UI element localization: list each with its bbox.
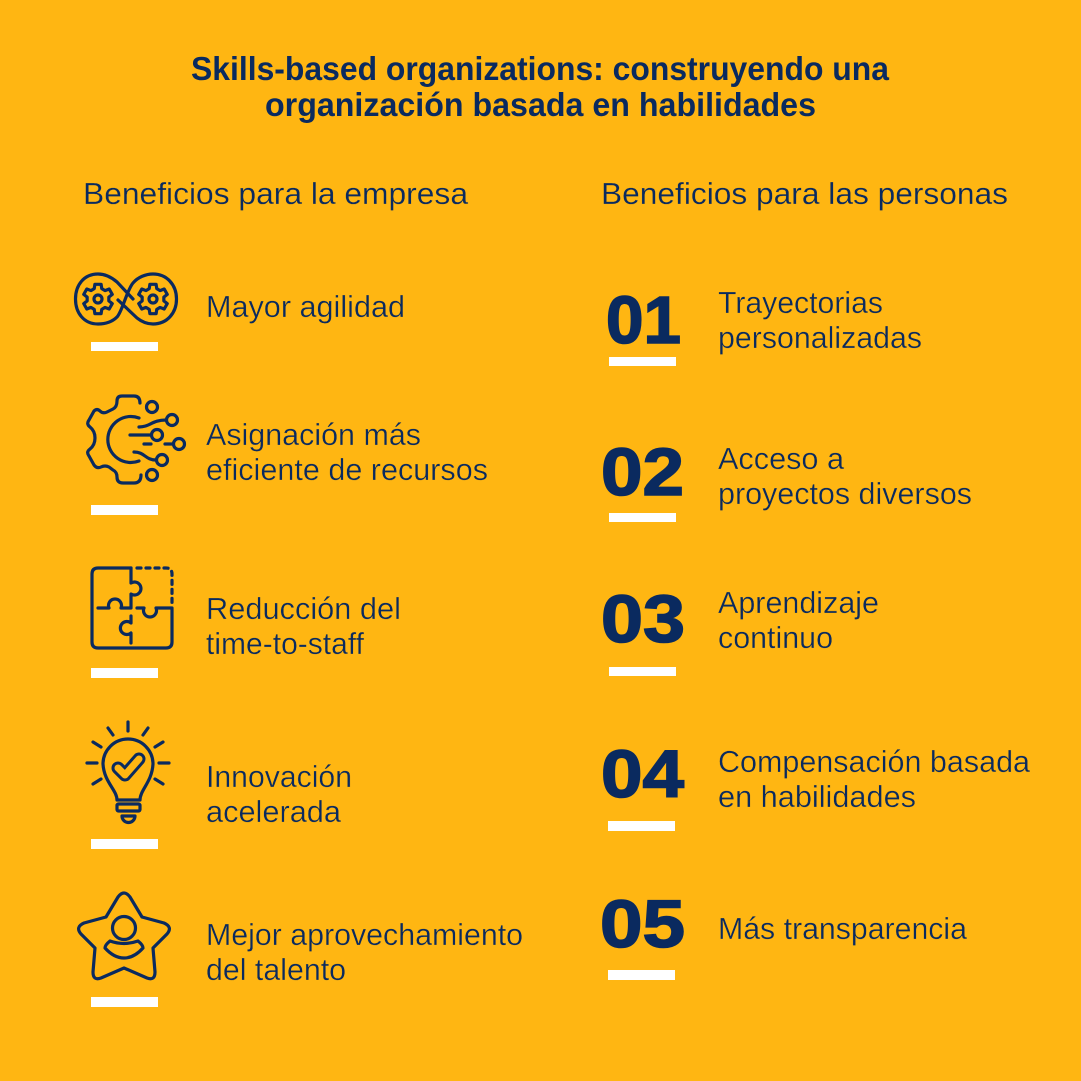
- bar: [91, 668, 158, 678]
- icon: light bulb with check: [87, 722, 169, 823]
- bar: [91, 342, 158, 351]
- heading: company benefits: Beneficios para la empresa: [83, 176, 469, 211]
- label: acelerada: [206, 794, 342, 829]
- item 02: [601, 435, 972, 522]
- bar: [91, 997, 158, 1007]
- icon: gear with circuit nodes: [88, 396, 184, 483]
- label: Aprendizaje: [718, 585, 879, 620]
- label: [718, 285, 922, 355]
- number 05: 05: [600, 887, 685, 962]
- title: [191, 50, 890, 123]
- item 05: [600, 887, 968, 980]
- label: personalizadas: [718, 320, 922, 355]
- item 01: [606, 283, 922, 366]
- label: [718, 744, 1031, 814]
- item 03: [601, 582, 879, 676]
- label: en habilidades: [718, 779, 916, 814]
- number 01: 01: [606, 283, 681, 358]
- panel: company benefits list: [76, 274, 523, 1007]
- panel: people benefits list: [600, 283, 1031, 980]
- bar: [609, 667, 676, 676]
- number 03: 03: [601, 582, 685, 657]
- item: asignacion de recursos: [88, 396, 488, 515]
- label: [206, 417, 488, 487]
- label: Asignación más: [206, 417, 421, 452]
- label: Compensación basada: [718, 744, 1031, 779]
- heading: people benefits: Beneficios para las personas: [601, 176, 1008, 211]
- bar: [608, 821, 675, 831]
- title: organización basada en habilidades: [265, 86, 816, 123]
- bar: [609, 513, 676, 522]
- item 04: [601, 737, 1031, 831]
- title: Skills-based organizations: construyendo una: [191, 50, 890, 87]
- label: Acceso a: [718, 441, 845, 476]
- label: time-to-staff: [206, 626, 364, 661]
- number 02: 02: [601, 435, 684, 510]
- label: proyectos diversos: [718, 476, 972, 511]
- label: del talento: [206, 952, 346, 987]
- label: [718, 441, 972, 511]
- label: Trayectorias: [718, 285, 883, 320]
- bar: [608, 970, 675, 980]
- label: Reducción del: [206, 591, 401, 626]
- label: [206, 759, 352, 829]
- label: Mayor agilidad: [206, 289, 405, 324]
- label: [206, 917, 523, 987]
- label: Mejor aprovechamiento: [206, 917, 523, 952]
- number 04: 04: [601, 737, 684, 812]
- bar: [91, 505, 158, 515]
- label: Innovación: [206, 759, 352, 794]
- label: [718, 585, 879, 655]
- item: innovacion acelerada: [87, 722, 352, 849]
- bar: [609, 357, 676, 366]
- icon: infinity with gears: [76, 274, 176, 324]
- icon: puzzle: [92, 568, 172, 648]
- label: continuo: [718, 620, 833, 655]
- item: mayor agilidad: [76, 274, 405, 351]
- label: Más transparencia: [718, 911, 968, 946]
- bar: [91, 839, 158, 849]
- item: reduccion time-to-staff: [91, 568, 401, 678]
- item: aprovechamiento del talento: [79, 893, 523, 1007]
- label: eficiente de recursos: [206, 452, 488, 487]
- icon: star with person: [79, 893, 169, 979]
- label: [206, 591, 401, 661]
